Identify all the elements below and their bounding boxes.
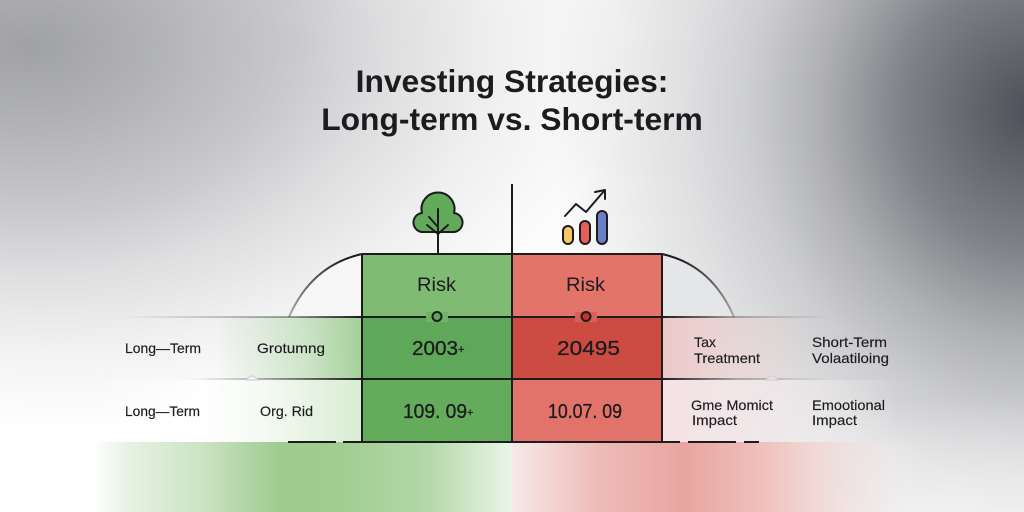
- panel: long-term green column: [362, 254, 512, 442]
- left labels: [125, 340, 325, 419]
- value 10.07.09: 10.07. 09: [548, 401, 622, 423]
- title: [321, 63, 703, 137]
- right labels: Gme Momict: [691, 397, 773, 413]
- red value cell 2: [512, 379, 662, 442]
- right labels: Treatment: [694, 350, 760, 366]
- green value cell 2: [362, 379, 512, 442]
- left labels: Grotumng: [257, 340, 325, 356]
- right row tint: row 1: [662, 317, 810, 379]
- right row tint: row 2: [662, 380, 900, 442]
- red header cell: [512, 254, 662, 317]
- left labels: Org. Rid: [260, 403, 313, 419]
- dome arc: left: [289, 254, 362, 317]
- left row whitening: row 2: [95, 380, 200, 442]
- green value cell 1: [362, 317, 512, 379]
- risk label: short-term: Risk: [566, 274, 605, 296]
- panel: short-term red column: [512, 254, 662, 442]
- left row tint: row 2: [200, 380, 362, 442]
- right labels: Volaatiloing: [812, 350, 889, 366]
- red value cell 1: [512, 317, 662, 379]
- bottom red band: [512, 442, 920, 512]
- row connector notch: left: [246, 376, 258, 380]
- dome interior: left: [289, 254, 362, 316]
- left labels: Long—Term: [125, 340, 201, 356]
- icon: tree: [413, 192, 463, 254]
- title: Investing Strategies:: [356, 63, 668, 99]
- value 2003+: +: [458, 344, 464, 356]
- value 109.09+: 109. 09: [403, 401, 467, 423]
- marker: green node: [426, 312, 448, 322]
- right labels: Impact: [812, 412, 857, 428]
- dome arc: right: [662, 254, 734, 317]
- green header cell: [362, 254, 512, 317]
- right labels: Short-Term: [812, 334, 887, 350]
- risk label: long-term: Risk: [417, 274, 456, 296]
- row connector notch: right: [766, 376, 778, 380]
- dome interior: right: [662, 254, 734, 316]
- table grid lines: [125, 184, 830, 442]
- title: Long-term vs. Short-term: [321, 101, 703, 137]
- icon: rising bar chart: [563, 190, 607, 244]
- right labels: Tax: [694, 334, 716, 350]
- bottom green band: [95, 442, 512, 512]
- value 109.09+: +: [467, 407, 473, 419]
- value 2003+: 2003: [412, 338, 458, 360]
- marker: red node: [575, 312, 597, 322]
- value 20495: 20495: [557, 338, 620, 360]
- right labels: Emootional: [812, 397, 885, 413]
- right labels: [691, 334, 889, 428]
- left labels: Long—Term: [125, 403, 200, 419]
- right labels: Impact: [692, 412, 737, 428]
- left row tint: row 1: [215, 317, 362, 379]
